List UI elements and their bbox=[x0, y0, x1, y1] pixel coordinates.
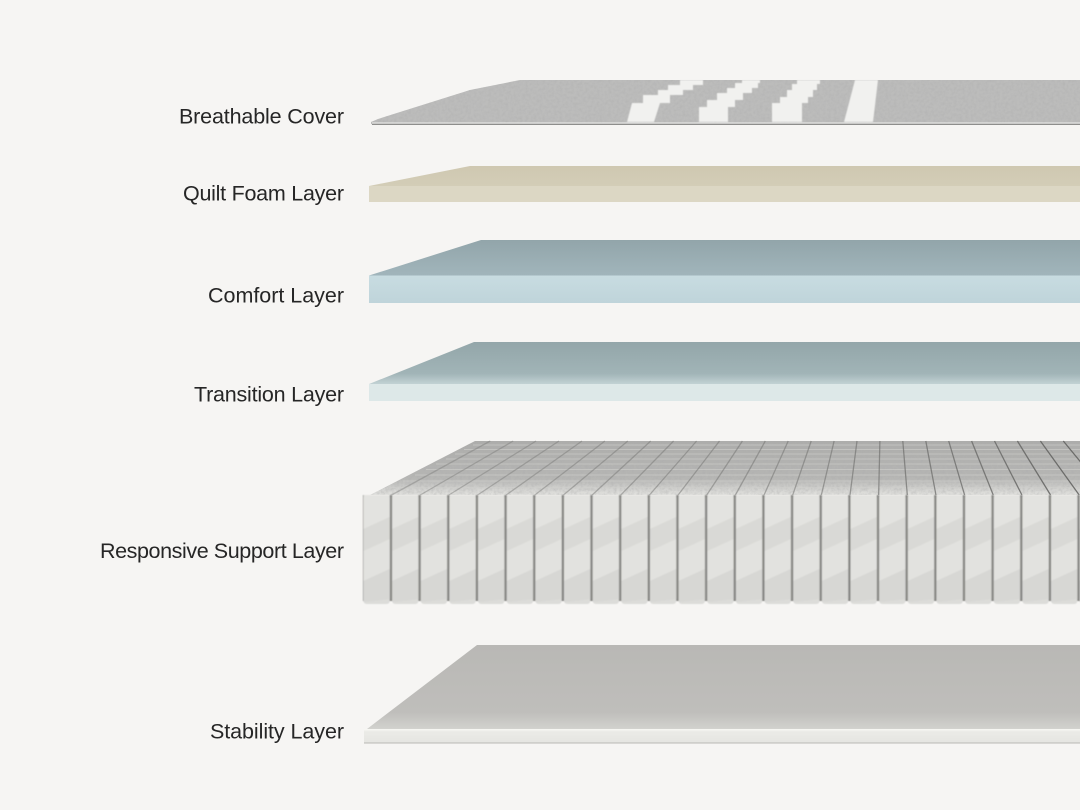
layer: transition bbox=[369, 342, 1080, 401]
label: Responsive Support Layer: Responsive Support Layer bbox=[100, 539, 344, 563]
label: Stability Layer: Stability Layer bbox=[210, 720, 344, 744]
label: Comfort Layer: Comfort Layer bbox=[208, 284, 344, 308]
layer: responsive support coils bbox=[363, 441, 1080, 604]
label: Breathable Cover: Breathable Cover bbox=[179, 104, 344, 128]
layer: comfort bbox=[369, 240, 1080, 303]
coil fronts bbox=[363, 495, 1080, 604]
label: Quilt Foam Layer: Quilt Foam Layer bbox=[183, 182, 344, 206]
label: Transition Layer: Transition Layer bbox=[194, 382, 344, 406]
layer: quilt foam bbox=[369, 166, 1080, 202]
coil tops bbox=[370, 441, 1080, 495]
cover stripes bbox=[627, 80, 878, 122]
layer: stability bbox=[364, 645, 1080, 744]
layer: breathable cover bbox=[371, 80, 1080, 125]
